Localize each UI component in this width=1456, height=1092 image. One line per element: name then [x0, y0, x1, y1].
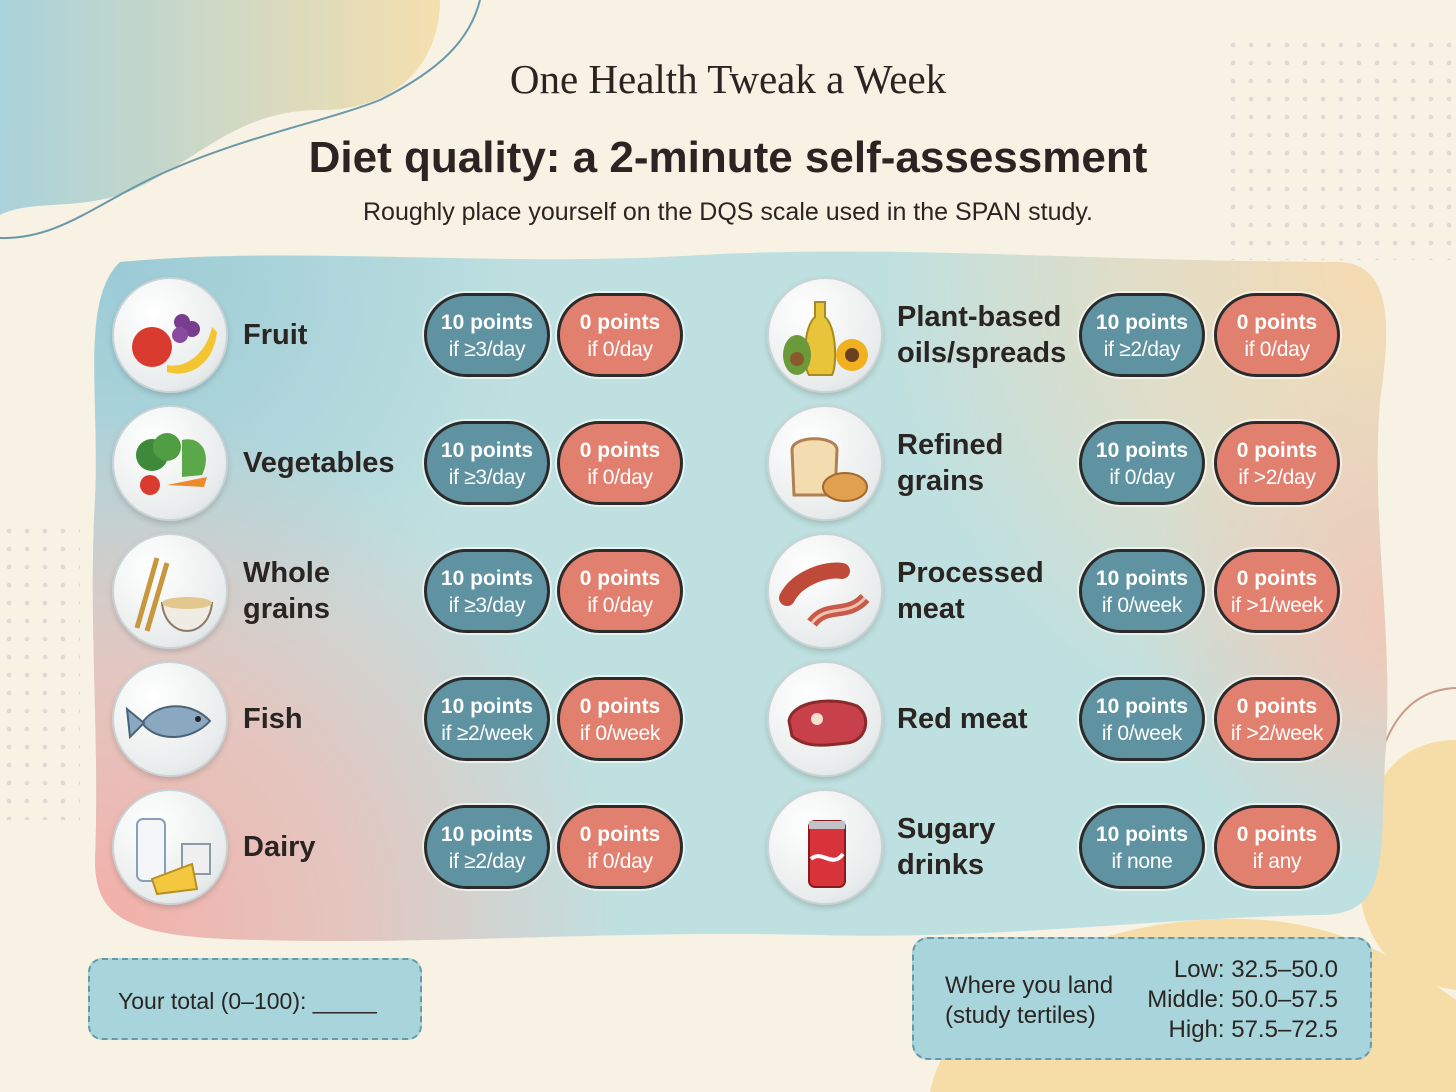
pill: 10 points: if 0/week: [1102, 594, 1182, 617]
pill: 10 points: if ≥3/day: [449, 338, 525, 361]
pill: 10 points: 10 points: [441, 311, 533, 334]
row: Processed meat: [766, 533, 1342, 654]
pill: 0 points: if >2/week: [1231, 722, 1323, 745]
label: Dairy: [243, 831, 316, 863]
pill: 0 points: 0 points: [580, 311, 660, 334]
main panel background: [92, 252, 1388, 941]
row: Red meat: [766, 661, 1342, 782]
pill: 0 points: [557, 677, 683, 761]
pill: 0 points: [1214, 805, 1340, 889]
icon: vegetables: [112, 405, 228, 521]
label: [897, 813, 996, 881]
pill: 10 points: 10 points: [1096, 695, 1188, 718]
label: Refined: [897, 429, 1003, 461]
label: meat: [897, 593, 965, 625]
label: Sugary: [897, 813, 995, 845]
pill: 10 points: 10 points: [1096, 567, 1188, 590]
subtitle: Roughly place yourself on the DQS scale used in the SPAN study.: [363, 198, 1093, 226]
pill: 10 points: if ≥2/week: [441, 722, 533, 745]
icon: dairy: [112, 789, 228, 905]
label: Fish: [243, 703, 303, 735]
label: drinks: [897, 849, 984, 881]
pill: 0 points: 0 points: [580, 695, 660, 718]
icon: oils: [767, 277, 883, 393]
callout: your total: [88, 958, 422, 1040]
pill: 0 points: 0 points: [1237, 311, 1317, 334]
pill: 10 points: 10 points: [1096, 439, 1188, 462]
pill: 0 points: [557, 421, 683, 505]
pill: 0 points: if 0/day: [587, 338, 653, 361]
pill: 0 points: if 0/day: [587, 466, 653, 489]
callout: where you land: [912, 937, 1372, 1060]
pill: 10 points: if 0/day: [1109, 466, 1175, 489]
pill: 10 points: if ≥2/day: [1104, 338, 1180, 361]
pill: 10 points: 10 points: [1096, 311, 1188, 334]
label: Processed: [897, 557, 1044, 589]
callout: your total: Your total (0–100): _____: [118, 988, 377, 1014]
pill: 0 points: if >2/day: [1238, 466, 1316, 489]
pill: 0 points: 0 points: [1237, 695, 1317, 718]
icon: processed meat: [767, 533, 883, 649]
row: Fruit: [110, 277, 685, 398]
pill: 0 points: [1214, 293, 1340, 377]
label: Plant-based: [897, 301, 1061, 333]
pill: 0 points: if any: [1253, 850, 1301, 873]
row: Sugary drinks: [766, 789, 1342, 910]
pill: 10 points: [424, 677, 550, 761]
pill: 0 points: if 0/week: [580, 722, 660, 745]
callout: where you land: (study tertiles): [945, 1002, 1096, 1029]
pill: 10 points: 10 points: [441, 439, 533, 462]
pill: 0 points: 0 points: [580, 439, 660, 462]
row: Vegetables: [110, 405, 685, 526]
row: Plant-based oils: [766, 277, 1342, 398]
label: [243, 557, 330, 625]
pill: 10 points: [1079, 293, 1205, 377]
pill: 10 points: if 0/week: [1102, 722, 1182, 745]
pill: 0 points: if 0/day: [587, 850, 653, 873]
pill: 10 points: if ≥2/day: [449, 850, 525, 873]
pill: 0 points: if >1/week: [1231, 594, 1323, 617]
pill: 10 points: [1079, 549, 1205, 633]
pill: 0 points: [1214, 677, 1340, 761]
pill: 0 points: 0 points: [1237, 439, 1317, 462]
callout: where you land: Low: 32.5–50.0: [1174, 956, 1338, 983]
icon: steak: [767, 661, 883, 777]
pill: 0 points: [557, 293, 683, 377]
label: Vegetables: [243, 447, 395, 479]
icon: bread: [767, 405, 883, 521]
row: Dairy: [110, 789, 685, 910]
pill: 10 points: [1079, 677, 1205, 761]
icon: fish: [112, 661, 228, 777]
pill: 10 points: [424, 805, 550, 889]
label: [897, 557, 1044, 625]
series title: One Health Tweak a Week: [510, 56, 946, 102]
icon: fruit: [112, 277, 228, 393]
pill: 10 points: [1079, 805, 1205, 889]
pill: 0 points: [557, 805, 683, 889]
pill: 0 points: [1214, 549, 1340, 633]
pill: 10 points: [424, 421, 550, 505]
icon: whole grains: [112, 533, 228, 649]
pill: 0 points: 0 points: [1237, 567, 1317, 590]
row: Fish: [110, 661, 685, 782]
pill: 10 points: [1079, 421, 1205, 505]
pill: 10 points: if ≥3/day: [449, 594, 525, 617]
label: oils/spreads: [897, 337, 1066, 369]
pill: 0 points: 0 points: [580, 567, 660, 590]
pill: 10 points: 10 points: [441, 567, 533, 590]
callout: where you land: Where you land: [945, 972, 1113, 999]
label: grains: [897, 465, 984, 497]
label: Red meat: [897, 703, 1028, 735]
row: Whole grains: [110, 535, 685, 654]
pill: 10 points: [424, 293, 550, 377]
label: Whole: [243, 557, 330, 589]
pill: 0 points: [1214, 421, 1340, 505]
pill: 0 points: 0 points: [580, 823, 660, 846]
icon: soda can: [767, 789, 883, 905]
pill: 0 points: [557, 549, 683, 633]
label: grains: [243, 593, 330, 625]
pill: 10 points: [424, 549, 550, 633]
pill: 0 points: if 0/day: [1244, 338, 1310, 361]
label: [897, 301, 1066, 369]
pill: 10 points: if ≥3/day: [449, 466, 525, 489]
pill: 10 points: 10 points: [441, 695, 533, 718]
callout: where you land: Middle: 50.0–57.5: [1147, 986, 1338, 1013]
pill: 10 points: 10 points: [441, 823, 533, 846]
pill: 10 points: 10 points: [1096, 823, 1188, 846]
label: Fruit: [243, 319, 307, 351]
label: [897, 429, 1003, 497]
pill: 0 points: if 0/day: [587, 594, 653, 617]
callout: where you land: High: 57.5–72.5: [1169, 1016, 1338, 1043]
pill: 0 points: 0 points: [1237, 823, 1317, 846]
pill: 10 points: if none: [1112, 850, 1172, 873]
heading: Diet quality: a 2-minute self-assessment: [309, 133, 1147, 182]
row: Refined grains: [766, 405, 1342, 526]
